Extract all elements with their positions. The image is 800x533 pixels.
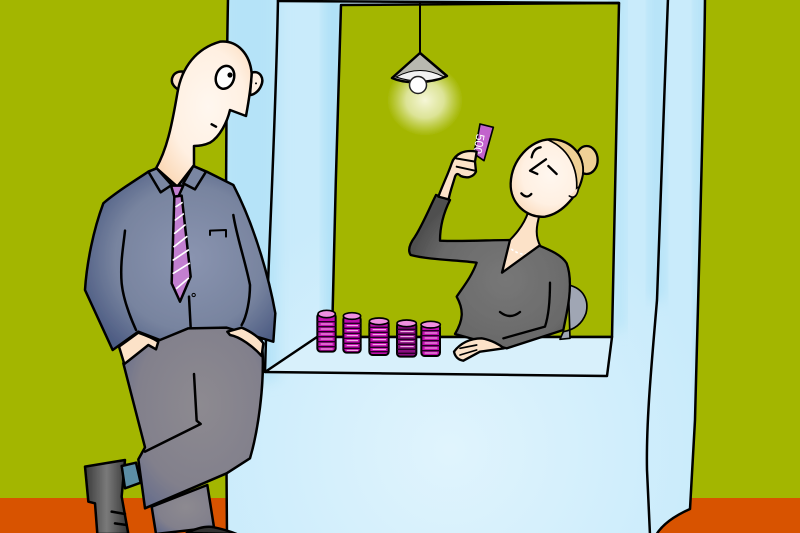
right ear [250, 72, 262, 95]
hair [548, 140, 583, 195]
man [85, 42, 275, 533]
man upper body [85, 42, 275, 364]
banknote [470, 124, 493, 161]
jacket [85, 166, 275, 350]
neck and head [156, 42, 252, 187]
shade underside [396, 70, 444, 81]
left hand [119, 333, 158, 364]
necklace [512, 249, 533, 254]
mouth [212, 124, 216, 127]
coin stack 1 [317, 310, 336, 352]
shoe laces [112, 512, 127, 525]
hand fingers [460, 345, 477, 355]
note value: 500 [470, 133, 487, 155]
trouser crease [145, 374, 201, 452]
right hand [227, 328, 263, 356]
front shoe [187, 527, 237, 533]
eye [548, 166, 557, 174]
tie [171, 186, 191, 302]
sweater [409, 195, 570, 348]
fingers [456, 158, 475, 171]
booth corner edge [647, 0, 668, 533]
raised hand [438, 151, 477, 199]
booth body [226, 0, 705, 533]
coin stack 4 [397, 320, 416, 357]
booth window opening [332, 3, 619, 337]
trousers [123, 320, 263, 508]
woman teller [409, 124, 598, 361]
tie stripes [173, 203, 189, 288]
button [192, 293, 195, 297]
head [511, 139, 583, 217]
left ear [172, 71, 183, 91]
collar left [148, 168, 172, 192]
jacket placket and folds [121, 215, 250, 330]
sweater details [500, 283, 550, 338]
coin stack 5 [421, 321, 440, 356]
lamp glow [387, 64, 463, 136]
lamp cord [419, 2, 421, 53]
counter hand [454, 338, 504, 361]
sock [122, 463, 141, 488]
hair bun [576, 146, 598, 174]
chair back [560, 285, 587, 339]
man lower body [85, 320, 263, 533]
ceiling lamp [387, 2, 463, 136]
pocket [210, 230, 226, 237]
eyebrow and nose [530, 147, 546, 174]
floor [0, 498, 800, 533]
booth top edge [278, 1, 619, 3]
booth left edge [226, 0, 228, 533]
ear inner [255, 82, 257, 84]
neck [502, 212, 541, 273]
coin stack 2 [343, 313, 361, 353]
collar right [183, 166, 206, 189]
booth [220, 0, 710, 533]
mouth [521, 193, 531, 197]
eye [213, 63, 237, 91]
pupil [229, 74, 231, 76]
stacks of coins [317, 310, 440, 357]
light bulb [410, 76, 426, 94]
standing leg [152, 485, 214, 533]
counter top [265, 337, 612, 376]
coin stack 3 [369, 318, 389, 355]
booth column edge [265, 0, 278, 372]
booth outer right edge [656, 0, 705, 533]
booth colour wash [220, 0, 710, 520]
lamp shade [392, 53, 447, 82]
ear [569, 187, 578, 197]
back shoe [85, 460, 128, 533]
